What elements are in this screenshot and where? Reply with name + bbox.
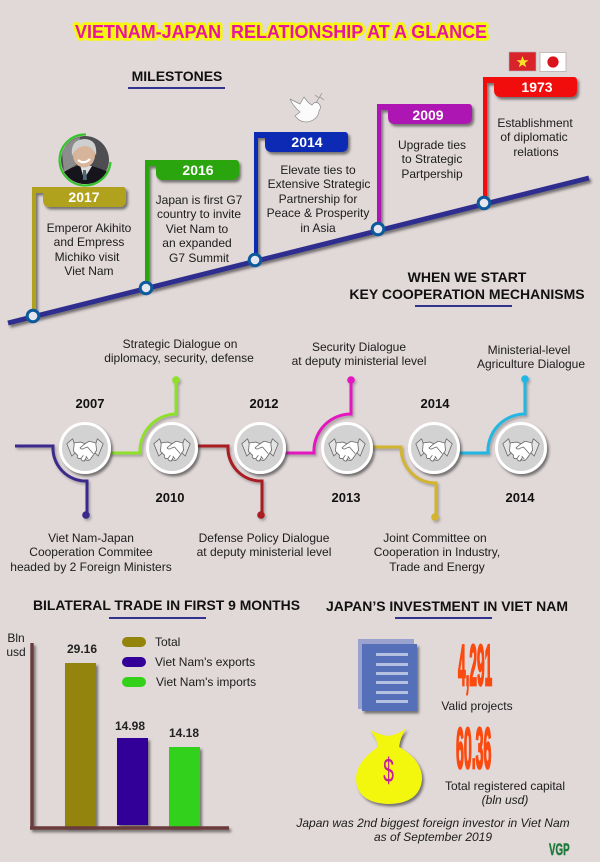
legend: Total bbox=[155, 635, 180, 649]
title: VIETNAM-JAPAN RELATIONSHIP AT A GLANCE bbox=[75, 21, 487, 42]
flag: Viet Nam bbox=[509, 52, 536, 71]
text: cooperation committee: Viet Nam-Japan bbox=[48, 531, 134, 545]
text 2009: Partpership bbox=[401, 167, 463, 181]
flag: Japan bbox=[540, 52, 566, 72]
text 2014: Elevate ties to bbox=[280, 163, 356, 177]
text 2014: in Asia bbox=[300, 221, 336, 235]
connector: 2013 bbox=[282, 376, 355, 453]
axes bbox=[30, 643, 229, 828]
connector: 2007 bbox=[15, 446, 90, 519]
icon: handshake 2012 bbox=[236, 424, 284, 472]
year 2009: 2009 bbox=[412, 107, 444, 123]
mechanism years: 2010 bbox=[156, 490, 184, 505]
year 2016: 2016 bbox=[182, 162, 214, 178]
heading: bilateral trade: BILATERAL TRADE IN FIRST 9 MONTHS bbox=[33, 597, 300, 613]
text 2016: an expanded bbox=[162, 236, 232, 250]
text 2016: country to invite bbox=[157, 207, 241, 221]
flag 2016 bbox=[145, 160, 239, 288]
mechanism years: 2014 bbox=[421, 396, 450, 411]
icon: handshake 2010 bbox=[148, 424, 196, 472]
icon: money bag bbox=[356, 728, 422, 804]
text: cooperation committee: headed by 2 Foreign Ministers bbox=[10, 560, 172, 574]
text 2009: to Strategic bbox=[402, 152, 462, 166]
connector: 2014 agriculture bbox=[458, 375, 529, 453]
stat: capital: Total registered capital bbox=[445, 779, 565, 793]
flag 2009 bbox=[377, 104, 472, 229]
bar chart: 14.18 bbox=[169, 726, 199, 740]
text 1973: of diplomatic bbox=[500, 130, 568, 144]
bar chart: 14.98 bbox=[115, 719, 145, 733]
year 2017: 2017 bbox=[68, 189, 100, 205]
stat: capital bbox=[445, 716, 565, 807]
heading: cooperation mechanisms: KEY COOPERATION MECHANISMS bbox=[349, 286, 585, 302]
text: strategic dialogue: Strategic Dialogue on bbox=[123, 337, 237, 351]
heading: investment: JAPAN’S INVESTMENT IN VIET NAM bbox=[326, 598, 568, 614]
text: joint committee: Trade and Energy bbox=[389, 560, 485, 574]
milestone 2016 bbox=[145, 160, 243, 288]
icon: handshake 2013 bbox=[322, 424, 372, 472]
note: Japan was 2nd biggest foreign investor in Viet Nam bbox=[295, 816, 570, 830]
text 2016: G7 Summit bbox=[169, 251, 230, 265]
icon: dove bbox=[290, 93, 324, 122]
axis label: Bln bbox=[7, 631, 25, 645]
milestone 1973 bbox=[483, 77, 577, 203]
flag 2014 bbox=[254, 132, 348, 260]
milestone 2014 bbox=[254, 132, 370, 260]
text 2016: Viet Nam to bbox=[166, 222, 229, 236]
mechanism years: 2013 bbox=[332, 490, 360, 505]
heading: milestones: MILESTONES bbox=[132, 68, 222, 84]
text 2017: and Empress bbox=[54, 235, 124, 249]
icon: money bag: $ bbox=[383, 751, 394, 789]
stat: projects: 4,291 bbox=[458, 633, 492, 697]
text 2017: Emperor Akihito bbox=[47, 221, 132, 235]
bar: imports bbox=[169, 747, 200, 827]
stat: capital: (bln usd) bbox=[482, 793, 528, 807]
text: strategic dialogue: diplomacy, security, defense bbox=[104, 351, 254, 365]
bar chart bbox=[6, 631, 229, 828]
text: defense dialogue: Defense Policy Dialogue bbox=[199, 531, 330, 545]
text 2014: Peace & Prosperity bbox=[267, 206, 369, 220]
timeline line bbox=[8, 178, 589, 323]
text: security dialogue: at deputy ministerial level bbox=[292, 354, 426, 368]
text: cooperation committee: Cooperation Commitee bbox=[29, 545, 153, 559]
text 2009: Upgrade ties bbox=[398, 138, 466, 152]
icon: handshake 2007 bbox=[60, 424, 110, 472]
legend: Viet Nam's imports bbox=[156, 675, 256, 689]
text 2017: Michiko visit bbox=[55, 250, 120, 264]
ring bbox=[60, 134, 110, 185]
bar values: 29.16 bbox=[67, 642, 97, 656]
axis label: usd bbox=[6, 645, 26, 659]
legend: Viet Nam's exports bbox=[155, 655, 255, 669]
stat: projects: Valid projects bbox=[441, 699, 513, 713]
icon: handshake 2014 bbox=[410, 424, 458, 472]
flag 1973 bbox=[483, 77, 577, 203]
milestone 2017 bbox=[32, 187, 132, 316]
year 1973: 1973 bbox=[521, 79, 553, 95]
text: security dialogue: Security Dialogue bbox=[312, 340, 406, 354]
portrait: emperor bbox=[60, 134, 110, 185]
text 2014: Partnership for bbox=[279, 192, 357, 206]
connector: 2014 joint committee bbox=[370, 447, 439, 521]
timeline nodes bbox=[27, 197, 490, 322]
text: agriculture dialogue: Ministerial-level bbox=[488, 343, 570, 357]
heading: cooperation mechanisms bbox=[349, 269, 585, 307]
bar: exports bbox=[117, 738, 148, 825]
legend bbox=[122, 635, 256, 689]
connector: 2012 bbox=[196, 446, 265, 519]
text: joint committee: Joint Committee on bbox=[383, 531, 487, 545]
year 2014: 2014 bbox=[291, 134, 323, 150]
stat: projects bbox=[441, 633, 513, 713]
heading: cooperation mechanisms: WHEN WE START bbox=[408, 269, 527, 285]
mechanism years: 2014 bbox=[506, 490, 535, 505]
stat: capital: 60.36 bbox=[456, 716, 491, 780]
text: agriculture dialogue: Agriculture Dialogue bbox=[477, 357, 585, 371]
mechanism years: 2012 bbox=[250, 396, 278, 411]
flag 2017 bbox=[32, 187, 126, 316]
text 1973: relations bbox=[513, 145, 559, 159]
text 2014: Extensive Strategic bbox=[268, 177, 370, 191]
text: defense dialogue: at deputy ministerial level bbox=[197, 545, 331, 559]
text 1973: Establishment bbox=[497, 116, 573, 130]
bar: total bbox=[65, 663, 96, 827]
note: as of September 2019 bbox=[374, 830, 492, 844]
text: joint committee: Cooperation in Industry, bbox=[374, 545, 500, 559]
mechanism years: 2007 bbox=[76, 396, 104, 411]
credit: VGP: VGP bbox=[549, 840, 570, 859]
connector: 2010 bbox=[108, 376, 180, 453]
text 2016: Japan is first G7 bbox=[156, 193, 243, 207]
mechanism years bbox=[76, 396, 535, 505]
icon: handshake 2014 second bbox=[496, 424, 546, 472]
milestone 2009 bbox=[377, 104, 472, 229]
icon: document bbox=[358, 639, 417, 711]
text 2017: Viet Nam bbox=[64, 264, 114, 278]
